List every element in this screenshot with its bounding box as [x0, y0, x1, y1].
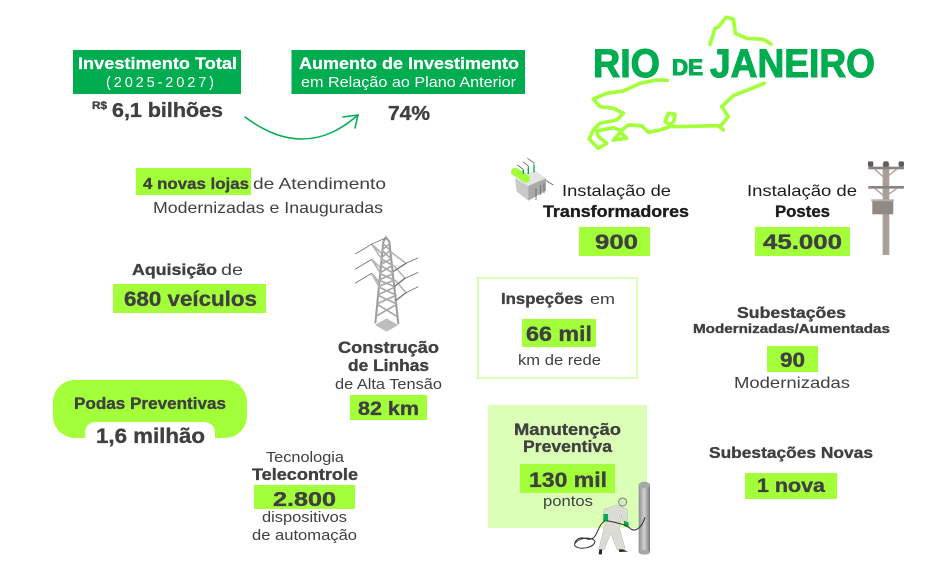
block: instalação de transformadores — [543, 183, 689, 256]
block: telecontrole: Tecnologia — [266, 450, 345, 466]
icon: utility pole — [868, 161, 904, 255]
icon: worker with hose and pole — [575, 482, 650, 555]
block: novas lojas: 4 novas lojas — [143, 176, 249, 193]
block: instalação de transformadores: 900 — [595, 231, 638, 254]
block: instalação de postes — [747, 183, 857, 256]
block: subestações novas: 1 nova — [757, 476, 825, 497]
block: subestações modernizadas: Subestações — [737, 305, 846, 322]
block: aquisição de veículos — [113, 262, 266, 313]
block: novas lojas — [136, 168, 386, 217]
heading: investimento total: Investimento Total — [78, 55, 237, 73]
panel: inspeções: km de rede — [518, 353, 601, 369]
title: Rio de Janeiro with state outline: JANEIRO — [710, 42, 875, 86]
title: Rio de Janeiro with state outline — [589, 17, 875, 148]
panel: podas preventivas: 1,6 milhão — [96, 425, 205, 448]
panel: manutenção preventiva: pontos — [543, 493, 593, 510]
block: instalação de transformadores: Instalação de — [562, 183, 671, 200]
block: construção de linhas: 82 km — [358, 398, 419, 420]
block: subestações novas — [709, 445, 873, 499]
title: Rio de Janeiro with state outline: DE — [672, 55, 703, 80]
panel: manutenção preventiva: Preventiva — [523, 437, 613, 456]
block: subestações modernizadas — [693, 305, 890, 392]
block: telecontrole: dispositivos — [262, 510, 347, 526]
heading: aumento de investimento: Aumento de Investimento — [299, 55, 519, 73]
value: 6,1 bilhões: R$ — [92, 100, 107, 112]
block: instalação de postes: Postes — [775, 203, 830, 221]
arrow: curved growth arrow — [245, 115, 358, 139]
panel: manutenção preventiva — [488, 405, 647, 528]
block: instalação de postes: Instalação de — [747, 183, 857, 200]
block: telecontrole: de automação — [252, 528, 357, 544]
panel: inspeções: Inspeções — [501, 291, 583, 308]
panel: aumento de investimento — [292, 50, 525, 125]
panel: investimento total — [73, 50, 241, 122]
panel: manutenção preventiva: 130 mil — [529, 469, 607, 492]
block: construção de linhas: de Linhas — [348, 357, 429, 375]
block: subestações modernizadas: Modernizadas — [734, 375, 850, 392]
block: subestações modernizadas: 90 — [780, 349, 805, 372]
icon: transmission tower — [355, 237, 418, 332]
block: telecontrole — [252, 450, 358, 544]
block: subestações modernizadas: Modernizadas/Aumentadas — [693, 321, 890, 336]
block: telecontrole: Telecontrole — [252, 466, 358, 484]
block: novas lojas: Modernizadas e Inauguradas — [153, 200, 383, 217]
block: novas lojas: de Atendimento — [253, 176, 386, 193]
panel: manutenção preventiva: Manutenção — [514, 420, 621, 439]
text: period: (2025-2027) — [106, 75, 214, 91]
block: construção de linhas: de Alta Tensão — [335, 377, 442, 393]
block: construção de linhas: Construção — [338, 339, 439, 357]
map outline — [589, 17, 771, 148]
value: 74%: 74% — [388, 102, 430, 125]
panel: inspeções: em — [590, 292, 615, 308]
block: instalação de transformadores: Transformadores — [543, 203, 689, 221]
block: aquisição de veículos: de — [221, 262, 243, 279]
panel: inspeções: 66 mil — [526, 323, 592, 346]
text: em relação ao plano anterior: em Relação ao Plano Anterior — [301, 75, 516, 91]
title: Rio de Janeiro with state outline: RIO — [593, 42, 660, 86]
block: construção de linhas — [335, 339, 442, 420]
block: aquisição de veículos: 680 veículos — [124, 288, 257, 311]
panel: podas preventivas: Podas Preventivas — [74, 395, 226, 413]
icon: transformer — [515, 158, 553, 201]
value: 6,1 bilhões: 6,1 bilhões — [112, 99, 223, 122]
panel: inspeções — [478, 278, 637, 378]
panel: podas preventivas — [53, 380, 247, 448]
block: telecontrole: 2.800 — [273, 489, 336, 511]
block: subestações novas: Subestações Novas — [709, 445, 873, 462]
block: aquisição de veículos: Aquisição — [132, 262, 217, 279]
block: instalação de postes: 45.000 — [763, 231, 842, 254]
